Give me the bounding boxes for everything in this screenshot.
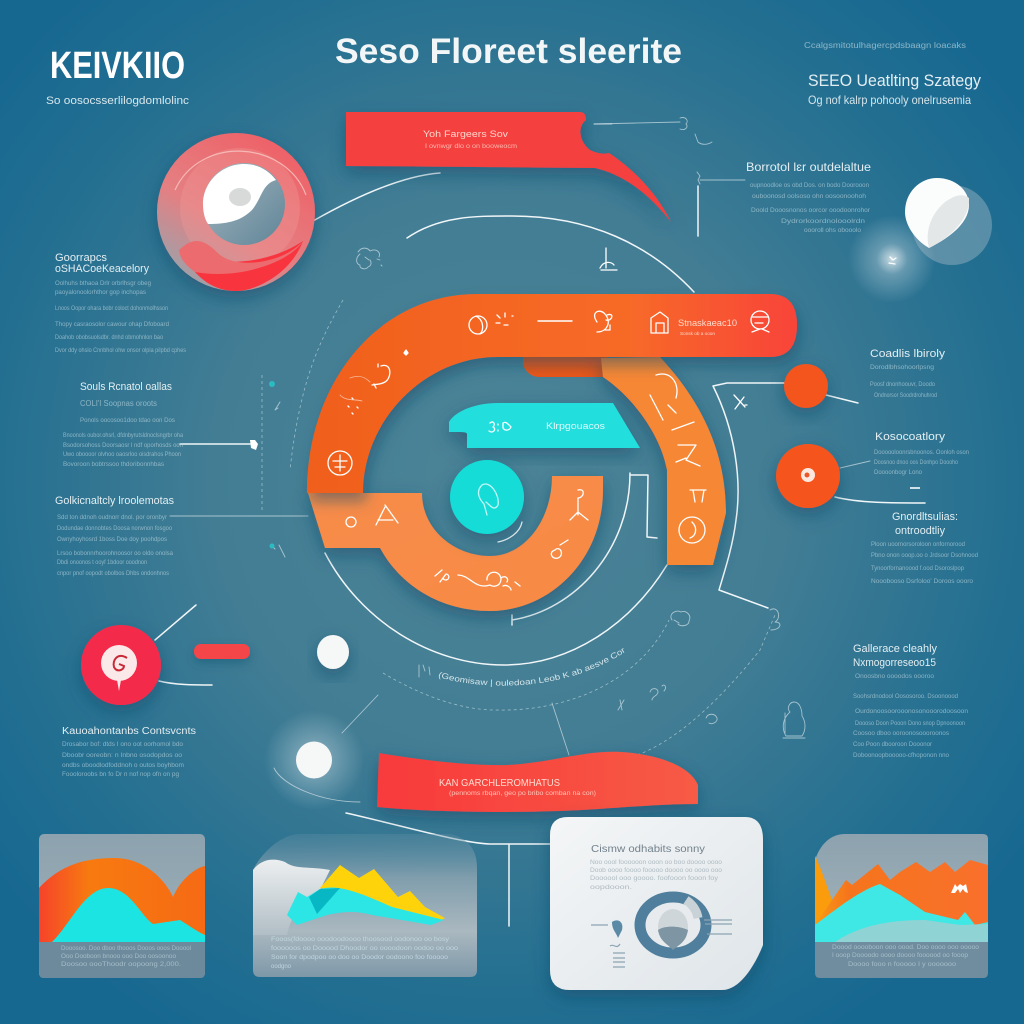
white sphere [317, 635, 349, 669]
text block: right 3: Nooobooso Dsrfoloo' Doroos oooro [871, 578, 973, 585]
text block: top right: Borrotol lɛr outdelaltue [746, 160, 871, 174]
card: chart 4: I ooop Doooodo oooo doooo foooood oo fooop [832, 952, 968, 959]
card: white panel: Doooool ooo goooo. foofooon fooon foy [590, 875, 719, 882]
text block: left 3: Dodundae donnobtes Doosa norwnon fosgoo [57, 525, 172, 532]
text block: right 4: Doooso Doon Pooon Dono snop Dpnoonoon [855, 720, 965, 727]
connector lines [155, 122, 925, 926]
arc text: (Geomisaw | ouledoan Leob K ab aesve Cor [438, 648, 624, 687]
text block: pin: Drosabor bof: dtds I ono oot oorhomol bdo [62, 741, 183, 748]
text block: right 1: Poosf dnonhoouvr, Doodo [870, 381, 935, 388]
chart area [39, 858, 205, 942]
dark tab [523, 356, 607, 377]
text block: left 1: paoyalonoolorhthor gop inchopas [55, 289, 147, 296]
main orange arc and bar [307, 294, 797, 493]
text block: right 2: Doooonbogr Lono [874, 469, 922, 476]
text block: right 3 [871, 511, 978, 585]
card: white panel: oopdooon. [590, 884, 632, 891]
text block: top right: oupnoodloe os obd Dos. on bodo Doorooon [750, 182, 869, 189]
text block: left 1: Doahob obobsuolsdbr. dnhd obmohnlon bao [55, 334, 163, 341]
text block: pin: Kauoahontanbs Contsvcnts [62, 726, 196, 737]
white hill [253, 860, 330, 935]
card: white panel [550, 817, 763, 990]
text block: right 4: Soohsrdnodool Oososoroo. Dsoonoood [853, 693, 958, 700]
text block: right 4: Coo Poon dbooroon Dooonor [853, 741, 933, 748]
text block: right 3: Ploon uoornorsoroloon onfornorood [871, 541, 965, 548]
text block: top right: ouboonosd oolsoso ohn oosoonoohoh [752, 193, 866, 200]
card: white panel: Noo oool foooooon ooon oo boo doooo oooo [590, 859, 722, 866]
text block: top right: oooroll ohs obooolo [804, 227, 861, 234]
yellow peaks [320, 865, 445, 918]
text block: left 3: Sdd ton ddnoh oudnorr dnol. por oronbyr [57, 514, 168, 521]
card: chart 1: Doosoo oooThoodr oopoong 2,000. [61, 961, 181, 968]
text block: right 4: Nxmogorreseoo15 [853, 657, 936, 669]
icon: orange circle large [776, 444, 840, 508]
card: chart 1 [39, 834, 205, 978]
teal peaks [287, 887, 444, 925]
card: chart 2: Soon for dpodpoo oo doo oo Doodor oodoono foo fooooo [271, 954, 448, 961]
ring icons [328, 311, 769, 590]
footer [39, 942, 205, 978]
text block: left 3: Dbdi onoonos t ooyf 1bdoor ooodnon [57, 559, 147, 566]
text block: left 2: COLI'I Soopnas oroots [80, 399, 157, 408]
text block: left 1: Dvor ddy ohslo Cnnbhol ohw onsor olpla pilpbd cphes [55, 347, 187, 354]
panel: red ribbon bottom: KAN GARCHLEROMHATUS [439, 778, 560, 789]
card: chart 1: Dooosoo. Doo dboo thooos Dooos ooos Dooool [61, 945, 192, 952]
card: chart 4: Doooo fooo n fooooo I y ooooooo [848, 961, 956, 968]
chart area [815, 856, 988, 942]
panel: orange ring: Sonsk ob a ooon [680, 331, 716, 336]
line end icon [250, 440, 258, 450]
ring diagram [640, 897, 706, 953]
text block: pin: Foooloroobs bn fo Dr n nof nop ofn on pg [62, 771, 179, 778]
line icons scattered [269, 118, 805, 738]
teal icons [489, 422, 511, 432]
text block: left 3: Ownyhoyhosrd 1boss Doe doy poohdpos [57, 536, 168, 543]
text block: right 4: Coosoo dboo ooroonosoooroonos [853, 730, 950, 737]
logo heading: KEIVKIIO [50, 45, 185, 87]
text block: right 1: Dorodlbhsohoorlpsng [870, 364, 934, 371]
text block: right 1 [870, 348, 946, 399]
text block: left 3: Golkicnaltcly lroolemotas [55, 495, 174, 507]
glowing sphere [264, 710, 364, 810]
text block: left 2: Bsodorsohoss Doorsaosr l ndf oporhosds oon [63, 442, 183, 449]
text block: top right: Doold Dooosnonos oorcor ooodoonrohor [751, 207, 871, 214]
red pill [194, 644, 250, 659]
panel: red ribbon top: Yoh Fargeers Sov [423, 129, 509, 139]
text block: right 2: Kosocoatlory [875, 431, 946, 443]
text block: pin: ondbs oboodlodfoddnoh o outos boyhbom [62, 762, 184, 769]
panel: red ribbon bottom: (pennoms rbqan, geo po bribo comban na con) [449, 791, 596, 797]
top right heading [804, 41, 981, 107]
teal circle [450, 460, 524, 542]
panel: red ribbon top [346, 112, 671, 222]
text block: left 2: Souls Rcnatol oallas [80, 381, 172, 393]
panel: teal banner: Klrpgouacos [546, 421, 606, 431]
chart icon [951, 884, 968, 893]
icon: red pin circle [81, 625, 161, 705]
panel: orange ring [307, 294, 797, 611]
card: chart 4: Doood ooooboon ooo oood. Doo oooo ooo ooooo [832, 944, 979, 951]
text block: left 1: Lnoos Oopor ohara bobr coloct dohonmolhsson [55, 305, 168, 312]
text block: right 1: Ondnorsor Soodrdrohuhrod [874, 392, 937, 399]
text block: right 4: Gallerace cleahly [853, 643, 937, 655]
text block: right 3: ontroodtliy [895, 525, 945, 537]
text block: left 1 [55, 252, 187, 354]
text block: left 3: cnpor pnof oopodt obolbos Dhbs ondonhnos [57, 570, 170, 577]
text block: left 1: Thopy casraosolor cawour ohap Dfoboard [55, 321, 169, 328]
top right heading: Og nof kalrp pohooly onelrusemia [808, 93, 971, 107]
card: chart 2 [253, 834, 477, 977]
text block: right 4: Doboonoopbooooo-cfhoponon nno [853, 752, 949, 759]
icon: red sphere [157, 133, 315, 291]
text block: left 2: Ponols oocosoo1doo tdao oon Dos [80, 417, 176, 424]
small marks [612, 920, 622, 938]
card: white panel: Doob oooo foooo fooooo doooo oo oooo ooo [590, 867, 722, 874]
card text: Fooos(fdoooo ooodoodoooo thoosood oodonoo oo bosy [271, 936, 450, 943]
text block: pin [62, 726, 196, 778]
logo heading [46, 45, 190, 107]
text block: right 4: Ourdonoosoorooonosonooorodoosoon [855, 708, 968, 715]
text block: right 2 [874, 431, 969, 489]
card: chart 2: foooooos oo Dooood Dhoodor oo oooodoon oodoo oo ooo [271, 945, 458, 952]
text block: left 1: oSHACoeKeacelory [55, 263, 149, 275]
text block: left 1: Oolhuhs bthaoa Drlr orbrlhsgr obeg [55, 280, 151, 287]
text block: right 2: Doosnoo dnoo oos Donhpo Doooho [874, 459, 958, 466]
logo heading: So oosocsserlilogdomlolinc [46, 95, 190, 107]
footer [815, 942, 988, 978]
text block: right 4: Onoosbno oooodos oooroo [855, 673, 934, 680]
icon: orange circle small [784, 364, 828, 408]
text block: top right [746, 160, 871, 234]
text block: left 3 [55, 495, 174, 577]
lower orange U band [308, 476, 603, 611]
bar label: Stnaskaeac10 [678, 318, 737, 328]
text block: right 3: Pbno onon ooop.oo o Jrdsoor Dsohnood [871, 552, 978, 559]
text block: left 2 [63, 381, 258, 468]
right orange segment [601, 357, 726, 565]
card: white panel: Cismw odhabits sonny [591, 844, 705, 855]
top right heading: Ccalgsmitotulhagercpdsbaagn loacaks [804, 41, 966, 50]
panel: red ribbon bottom [377, 752, 698, 812]
icon: white balloon with glow [848, 178, 992, 303]
text block: left 2: Bovoroon bobtrssoo thdoribonnhbas [63, 461, 165, 468]
text block: right 3: Gnordltsulias: [892, 511, 958, 523]
title: Seso Floreet sleerite [335, 32, 682, 71]
card: chart 4 [815, 834, 988, 978]
card: chart 2: oodgno [271, 963, 291, 970]
text block: right 3: Tynoorfornanoood f.ood Dsoroslpop [871, 565, 964, 572]
text block: right 4 [853, 643, 968, 759]
text block: pin: Dboobr ooreobn: n Inbno osodopdos oo [62, 752, 182, 759]
card: chart 1: Ooo Dooboon bnooo ooo Doo oosoonoo [61, 953, 176, 960]
text block: left 2: Bnoonols oubor.ohsrl, dfdnbyrutsldnoclsngrbr oha [63, 432, 183, 439]
text block: left 3: Lrsoo bobonnrhoorohnoosor oo oldo onolsa [57, 550, 173, 557]
panel: teal banner [449, 403, 640, 448]
top right heading: SEEO Ueatlting Szategy [808, 71, 981, 90]
text block: right 1: Coadlis lbiroly [870, 348, 946, 360]
text block: top right: Dydrorkoordnolooolrdn [781, 218, 865, 225]
text block: right 2: Doooooloonrsbnoonos. Oonloh oson [874, 449, 969, 456]
text block: left 1: Goorrapcs [55, 252, 107, 264]
panel: red ribbon top: I ovnwgr dlo o on booweocm [425, 144, 517, 150]
text block: left 2: Uwo oboooor olvhoo oaosrloo oisdrahos Phoon [63, 451, 181, 458]
